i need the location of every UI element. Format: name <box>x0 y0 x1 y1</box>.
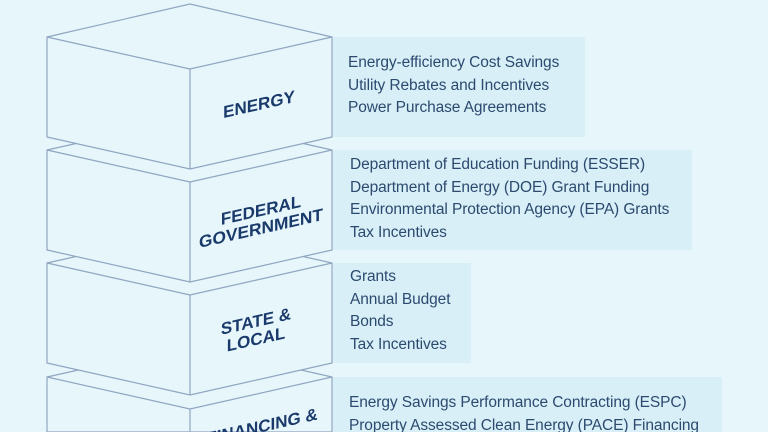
panel: state items: Tax Incentives <box>350 336 447 352</box>
box: energy <box>47 4 332 169</box>
panel: financing items: Energy Savings Performance Contracting (ESPC) <box>349 394 687 411</box>
box: state & local <box>47 231 332 395</box>
box: federal government: FEDERAL <box>221 191 301 229</box>
panel: state items: Bonds <box>350 313 393 330</box>
panel: federal items: Tax Incentives <box>350 224 447 240</box>
panel: federal items <box>333 150 692 250</box>
box: state & local: STATE & <box>221 303 291 339</box>
box: federal government: GOVERNMENT <box>199 204 323 252</box>
panel: state items: Annual Budget <box>350 290 450 308</box>
box: federal government <box>47 118 332 282</box>
panel: state items: Grants <box>350 268 396 285</box>
panel: federal items: Department of Energy (DOE) Grant Funding <box>350 178 649 196</box>
panel: federal items: Department of Education Funding (ESSER) <box>350 156 645 173</box>
panel: federal items: Environmental Protection Agency (EPA) Grants <box>350 201 669 218</box>
panel: energy items: Utility Rebates and Incentives <box>348 76 549 94</box>
box: energy: ENERGY <box>223 86 295 122</box>
panel: financing items <box>333 377 722 432</box>
panel: energy items: Power Purchase Agreements <box>348 99 546 116</box>
panel: energy items <box>333 37 585 137</box>
panel: energy items: Energy-efficiency Cost Savings <box>348 54 559 71</box>
box: financing <box>47 345 332 432</box>
box: state & local: LOCAL <box>227 323 285 356</box>
panel: state items <box>333 263 471 363</box>
